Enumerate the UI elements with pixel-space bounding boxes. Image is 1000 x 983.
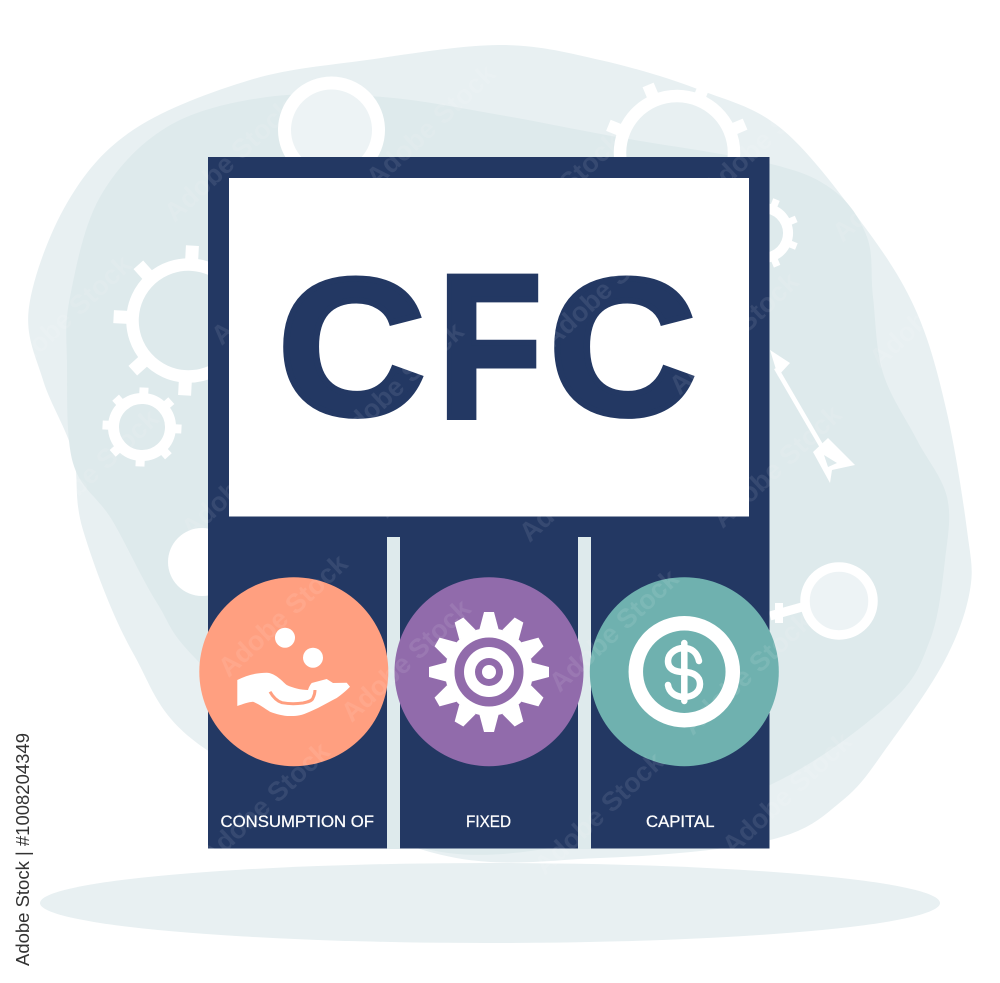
watermark: Adobe Stock <box>716 726 858 861</box>
watermark: Adobe Stock <box>543 563 685 698</box>
icon: gear <box>394 577 584 766</box>
decorative gear right small <box>730 190 810 270</box>
watermark: Adobe Stock <box>212 548 354 683</box>
watermark: Adobe Stock <box>486 126 628 261</box>
watermark: Adobe Stock <box>663 266 805 401</box>
title panel <box>229 178 749 516</box>
decorative gear top right <box>587 57 758 227</box>
decorative gear left large <box>110 242 248 398</box>
decorative arrow <box>770 350 855 483</box>
label: fixed: FIXED <box>466 813 511 831</box>
watermark: Adobe Stock <box>175 409 317 544</box>
background blob <box>28 45 972 863</box>
watermark: Adobe Stock <box>528 746 670 881</box>
title: C <box>549 239 696 456</box>
label: capital: CAPITAL <box>646 813 714 831</box>
title: F <box>438 233 542 461</box>
board <box>208 157 770 848</box>
stock id text: Adobe Stock | #1008204349 <box>13 733 33 966</box>
watermark: Adobe Stock <box>696 69 838 204</box>
icon: hand with coins <box>199 577 388 766</box>
watermark: Adobe Stock <box>513 413 655 548</box>
ground shadow <box>40 863 940 943</box>
watermark: Adobe Stock <box>0 249 138 384</box>
decorative magnifier <box>770 567 873 635</box>
decorative circle top left <box>284 83 378 177</box>
column dividers <box>387 537 591 849</box>
watermark: Adobe Stock <box>826 113 968 248</box>
watermark: Adobe Stock <box>536 219 678 354</box>
watermark: Adobe Stock <box>706 399 848 534</box>
watermark: Adobe Stock <box>360 58 502 193</box>
watermark: Adobe Stock <box>676 606 818 741</box>
watermark: Adobe Stock <box>23 403 165 538</box>
icon: dollar coin <box>590 577 779 766</box>
label: consumption of: CONSUMPTION OF <box>220 813 374 831</box>
watermark: Adobe Stock <box>30 49 172 184</box>
watermark: Adobe Stock <box>205 216 347 351</box>
watermark: Adobe Stock <box>335 593 477 728</box>
watermark: Adobe Stock <box>194 736 336 871</box>
decorative gear left small <box>100 385 184 469</box>
watermark: Adobe Stock <box>370 389 512 524</box>
title: C <box>278 239 426 456</box>
decorative circle left <box>168 528 236 596</box>
watermark: Adobe Stock <box>158 93 300 228</box>
watermark: Adobe Stock <box>328 316 470 451</box>
